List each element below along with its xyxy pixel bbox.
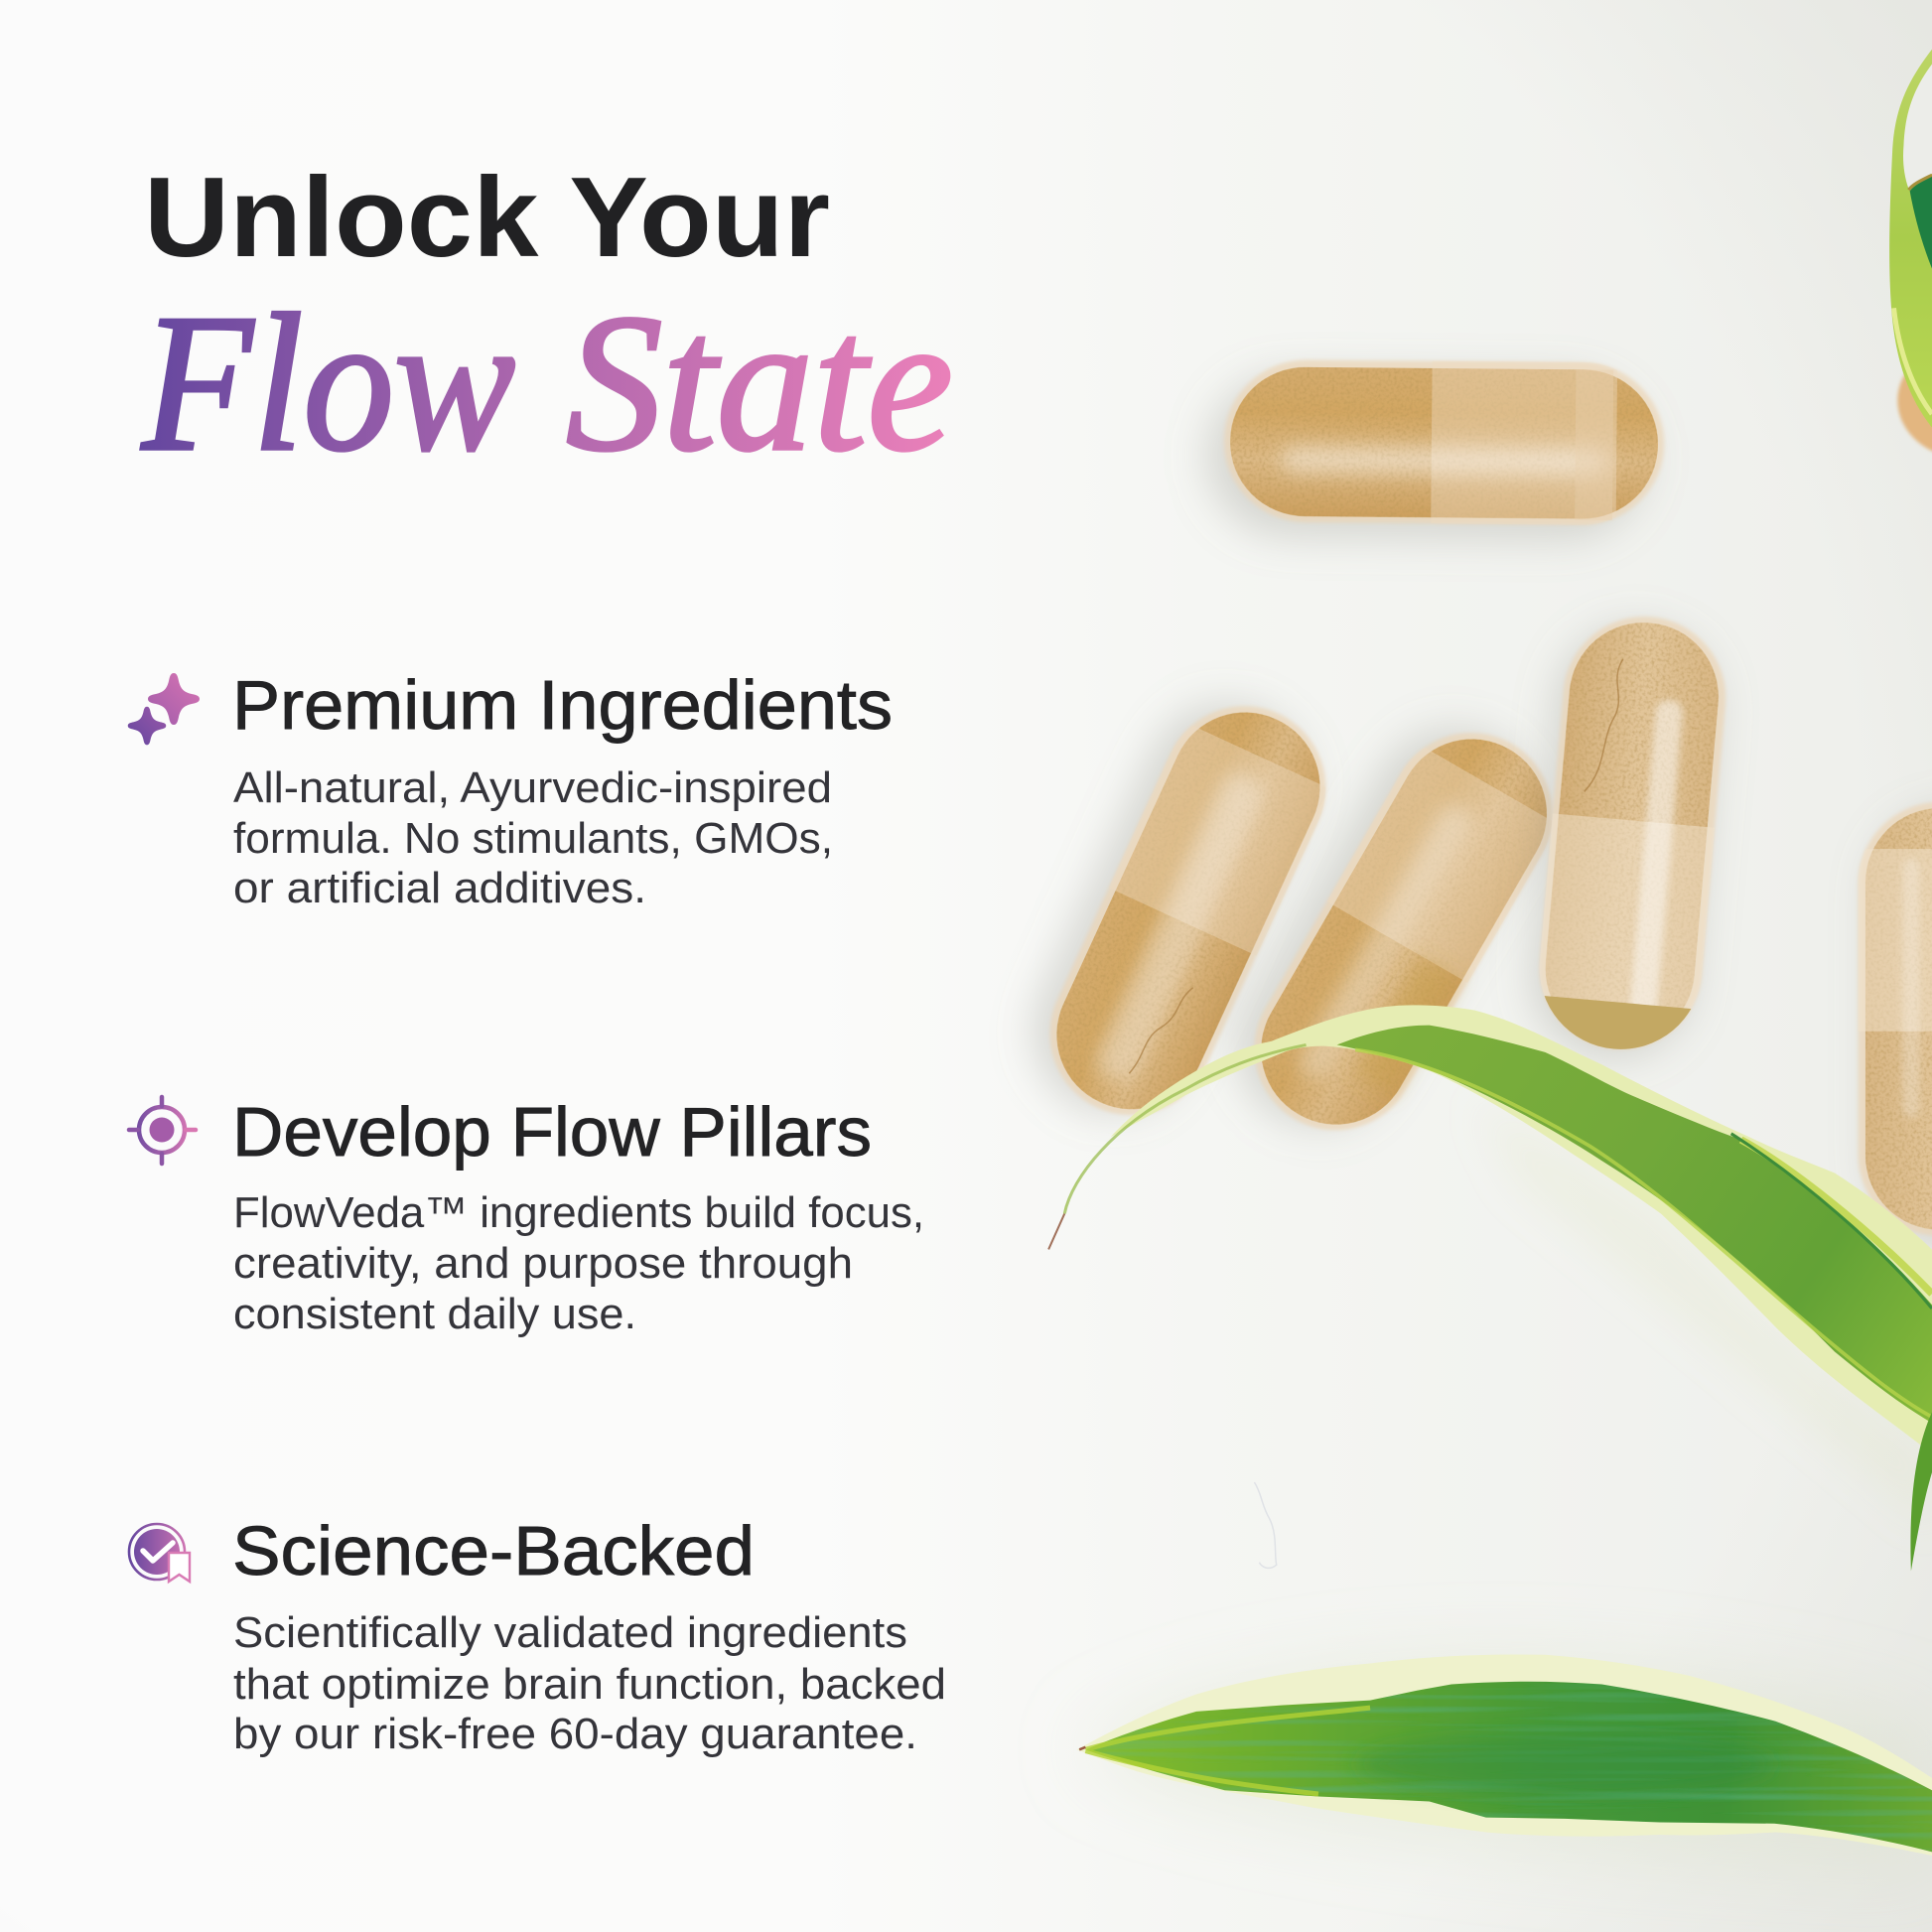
feature description: that optimize brain function, backed <box>233 1661 946 1709</box>
feature title: Develop Flow Pillars <box>232 1093 872 1171</box>
feature description: All-natural, Ayurvedic-inspired <box>233 764 832 812</box>
feature description: consistent daily use. <box>233 1291 636 1338</box>
capsule: tilted middle <box>1207 694 1587 1167</box>
feature description: by our risk-free 60-day guarantee. <box>233 1711 917 1758</box>
product photo: capsules and leaves <box>1006 50 1932 1872</box>
leaf: small blade at right edge <box>1910 1412 1932 1571</box>
feature description <box>233 764 833 912</box>
leaf: curved across capsules <box>1048 1005 1932 1528</box>
capsule: tilted left <box>1006 672 1357 1148</box>
capsule: horizontal top <box>1205 354 1665 540</box>
heading: Flow State: State <box>566 274 953 491</box>
capsule partly hidden at top right <box>1897 343 1932 459</box>
heading: Flow State: Flow <box>140 274 515 491</box>
heading: Unlock Your: Unlock Your <box>144 155 830 281</box>
icon: target <box>129 1097 196 1164</box>
icon: sparkles <box>128 673 200 745</box>
stray hair on backdrop <box>1254 1482 1277 1568</box>
feature description: formula. No stimulants, GMOs, <box>233 815 833 863</box>
feature title: Science-Backed <box>232 1512 755 1589</box>
icon: check badge <box>129 1524 190 1582</box>
feature description: Scientifically validated ingredients <box>233 1609 907 1657</box>
feature: Develop Flow Pillars <box>129 1093 924 1338</box>
feature description: or artificial additives. <box>233 865 646 912</box>
feature description: FlowVeda™ ingredients build focus, <box>233 1189 924 1237</box>
leaf: bottom <box>1077 1654 1932 1872</box>
capsule: cropped at right edge <box>1854 802 1932 1243</box>
feature: Science-Backed <box>129 1512 946 1758</box>
feature description: creativity, and purpose through <box>233 1240 853 1288</box>
feature title: Premium Ingredients <box>232 666 893 744</box>
capsule: upright right <box>1524 610 1737 1066</box>
heading: Flow State <box>140 274 953 491</box>
feature description <box>233 1609 946 1758</box>
feature: Premium Ingredients <box>128 666 893 912</box>
leaf: top right <box>1889 50 1932 428</box>
feature description <box>233 1189 924 1338</box>
